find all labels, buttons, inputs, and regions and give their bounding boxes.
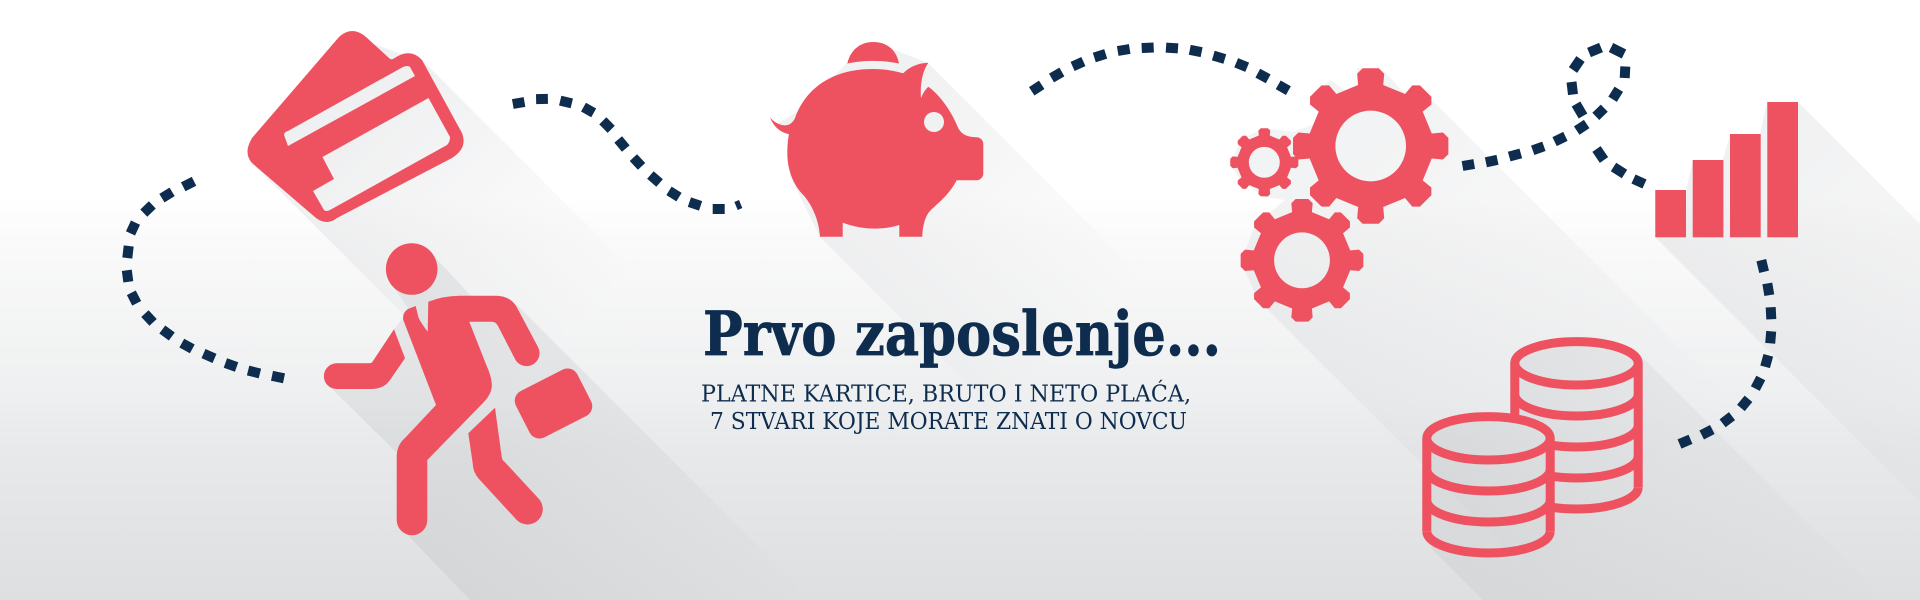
- pig body: [770, 63, 983, 237]
- icon: piggy bank: [770, 42, 983, 237]
- large gear: [1293, 68, 1448, 224]
- lower gear: [1241, 199, 1363, 322]
- coin: [847, 42, 899, 64]
- dashed path: piggy bank to gears: [1032, 48, 1288, 91]
- dashed path: bars to coins: [1680, 260, 1771, 444]
- subtitle: 7 STVARI KOJE MORATE ZNATI O NOVCU: [710, 409, 1187, 435]
- dashed path: left of card: [127, 181, 284, 378]
- man body and front leg: [397, 296, 540, 535]
- icon: credit cards: [248, 31, 464, 222]
- man back leg: [468, 408, 543, 524]
- icon: bar chart: [1655, 102, 1798, 237]
- icon: running man with briefcase: [324, 243, 596, 535]
- subtitle: [701, 381, 1191, 435]
- icon: coin stacks: [1427, 342, 1638, 553]
- left coin stack: [1427, 417, 1550, 553]
- small gear: [1230, 128, 1298, 196]
- man front arm: [324, 329, 405, 389]
- title: Prvo zaposlenje...: [703, 299, 1221, 370]
- briefcase: [511, 365, 596, 442]
- dashed path: gears loop to bars: [1462, 48, 1644, 184]
- right coin stack: [1515, 342, 1638, 509]
- pig eye: [924, 112, 944, 132]
- icon: gears: [1230, 68, 1448, 322]
- subtitle: PLATNE KARTICE, BRUTO I NETO PLAĆA,: [701, 381, 1191, 408]
- dashed path: card to piggy bank: [513, 99, 740, 209]
- man head: [386, 243, 438, 295]
